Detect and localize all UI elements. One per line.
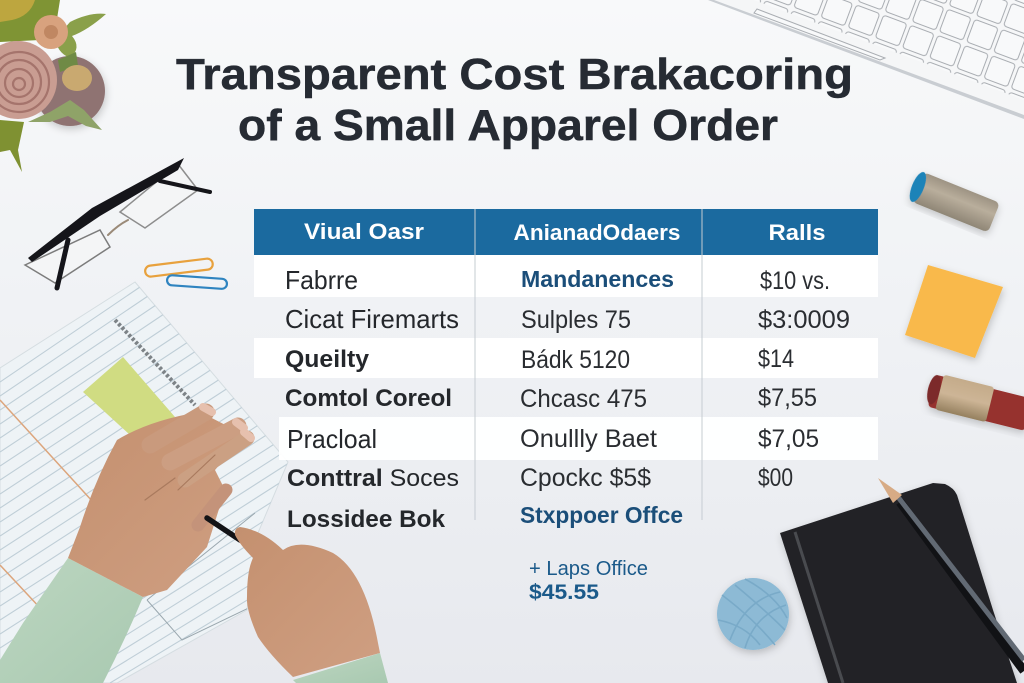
column 2 values: Cpockc $5$ — [520, 464, 651, 492]
column 3 prices: $7,55 — [758, 384, 817, 412]
table header — [254, 209, 878, 255]
column 2 values: Onullly Baet — [520, 425, 657, 453]
column 2 values: Mandanences — [521, 266, 674, 292]
column 2 values: Stxppoer Offce — [520, 502, 683, 528]
column 3 prices: $00 — [758, 464, 793, 492]
thread spool: blue — [906, 170, 1000, 233]
pencil — [878, 478, 1024, 671]
table header: AnianadOdaers — [514, 220, 680, 245]
column 3 prices — [758, 267, 850, 492]
column 1 labels — [285, 265, 459, 533]
column 2 values: Chcasc 475 — [520, 385, 647, 413]
column 1 labels: Queilty — [285, 346, 370, 373]
potted plant — [0, 0, 106, 172]
column 3 prices: $14 — [758, 345, 794, 373]
total callout: + Laps Office — [529, 558, 648, 580]
row bands — [254, 255, 878, 460]
black notebook — [780, 483, 1017, 683]
yellow sticky note — [905, 265, 1003, 358]
column 3 prices: $3:0009 — [758, 306, 850, 334]
column 1 labels: Conttral Soces — [287, 465, 459, 492]
title: of a Small Apparel Order — [238, 101, 778, 150]
column 3 prices: $7,05 — [758, 425, 819, 453]
right sleeve — [293, 653, 388, 683]
column 1 labels: Cicat Firemarts — [285, 304, 459, 334]
left sleeve — [0, 558, 143, 683]
left hand — [68, 407, 251, 597]
foliage — [0, 0, 106, 172]
green sticky note — [83, 357, 175, 435]
table header: Viual Oasr — [304, 219, 424, 244]
title — [176, 50, 853, 150]
column 1 labels: Lossidee Bok — [287, 506, 446, 533]
table header: Ralls — [768, 220, 826, 245]
flower: pink rosette — [0, 41, 57, 119]
column 1 labels: Pracloal — [287, 424, 377, 454]
flower: tan bud — [62, 65, 92, 91]
blue yarn ball — [717, 578, 789, 650]
column 2 values: Sulples 75 — [521, 306, 631, 334]
column 1 labels: Fabrre — [285, 265, 358, 295]
column 1 labels: Comtol Coreol — [285, 385, 452, 412]
total callout: $45.55 — [529, 581, 599, 604]
space bar — [754, 9, 885, 60]
pen — [207, 518, 240, 540]
column 2 values: Bádk 5120 — [521, 346, 630, 374]
column 3 prices: $10 vs. — [760, 267, 830, 295]
right hand — [235, 527, 380, 677]
title: Transparent Cost Brakacoring — [176, 50, 853, 99]
column 2 values — [520, 266, 683, 528]
paper clips — [145, 258, 227, 289]
flower: peach bud — [34, 15, 68, 49]
ruled paper sheet — [0, 282, 292, 683]
keyboard — [708, 0, 1024, 119]
total callout — [529, 558, 648, 604]
eyeglasses — [25, 158, 210, 288]
cost table — [254, 209, 878, 533]
thread spool: red — [924, 372, 1024, 432]
